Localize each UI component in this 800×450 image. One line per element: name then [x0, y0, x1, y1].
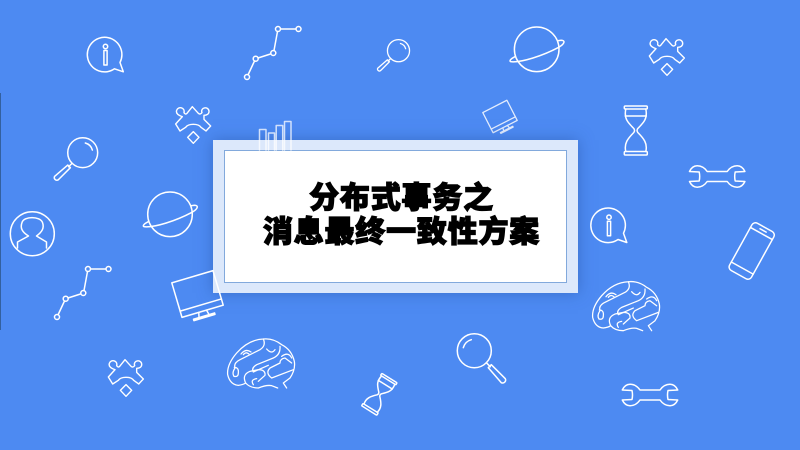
icon: planet left: [143, 192, 197, 237]
panel: title card: [213, 140, 578, 293]
heading: title line 1: 分布式事务之: [309, 182, 494, 215]
icon: smartphone: [728, 221, 776, 281]
icon: magnifier top: [378, 40, 410, 71]
heading: title line 2: 消息最终一致性方案: [263, 216, 540, 249]
icon: info bubble right: [591, 208, 627, 243]
icon: puzzle bottom left: [108, 360, 143, 396]
icon: wrench right: [690, 166, 745, 187]
icon: bar chart: [260, 122, 291, 150]
icon: hourglass right: [624, 106, 647, 155]
icon: brain bottom: [228, 339, 295, 388]
icon: planet top: [510, 27, 564, 72]
icon: large monitor: [172, 271, 225, 324]
icon: line chart left: [54, 266, 111, 320]
icon: small monitor: [483, 100, 519, 136]
icon: info bubble top left: [87, 37, 123, 72]
icon: line chart top: [244, 26, 301, 80]
icon: magnifier left: [54, 138, 98, 180]
inner white card: [224, 150, 567, 283]
icon: magnifier bottom: [457, 334, 506, 383]
icon: puzzle left: [176, 107, 211, 143]
icon: brain right: [593, 282, 660, 331]
icon: puzzle top right: [649, 39, 684, 75]
icon: wrench bottom: [622, 384, 678, 406]
icon: hourglass bottom: [362, 373, 397, 415]
icon: user avatar: [10, 212, 54, 256]
left edge line: [0, 93, 1, 330]
